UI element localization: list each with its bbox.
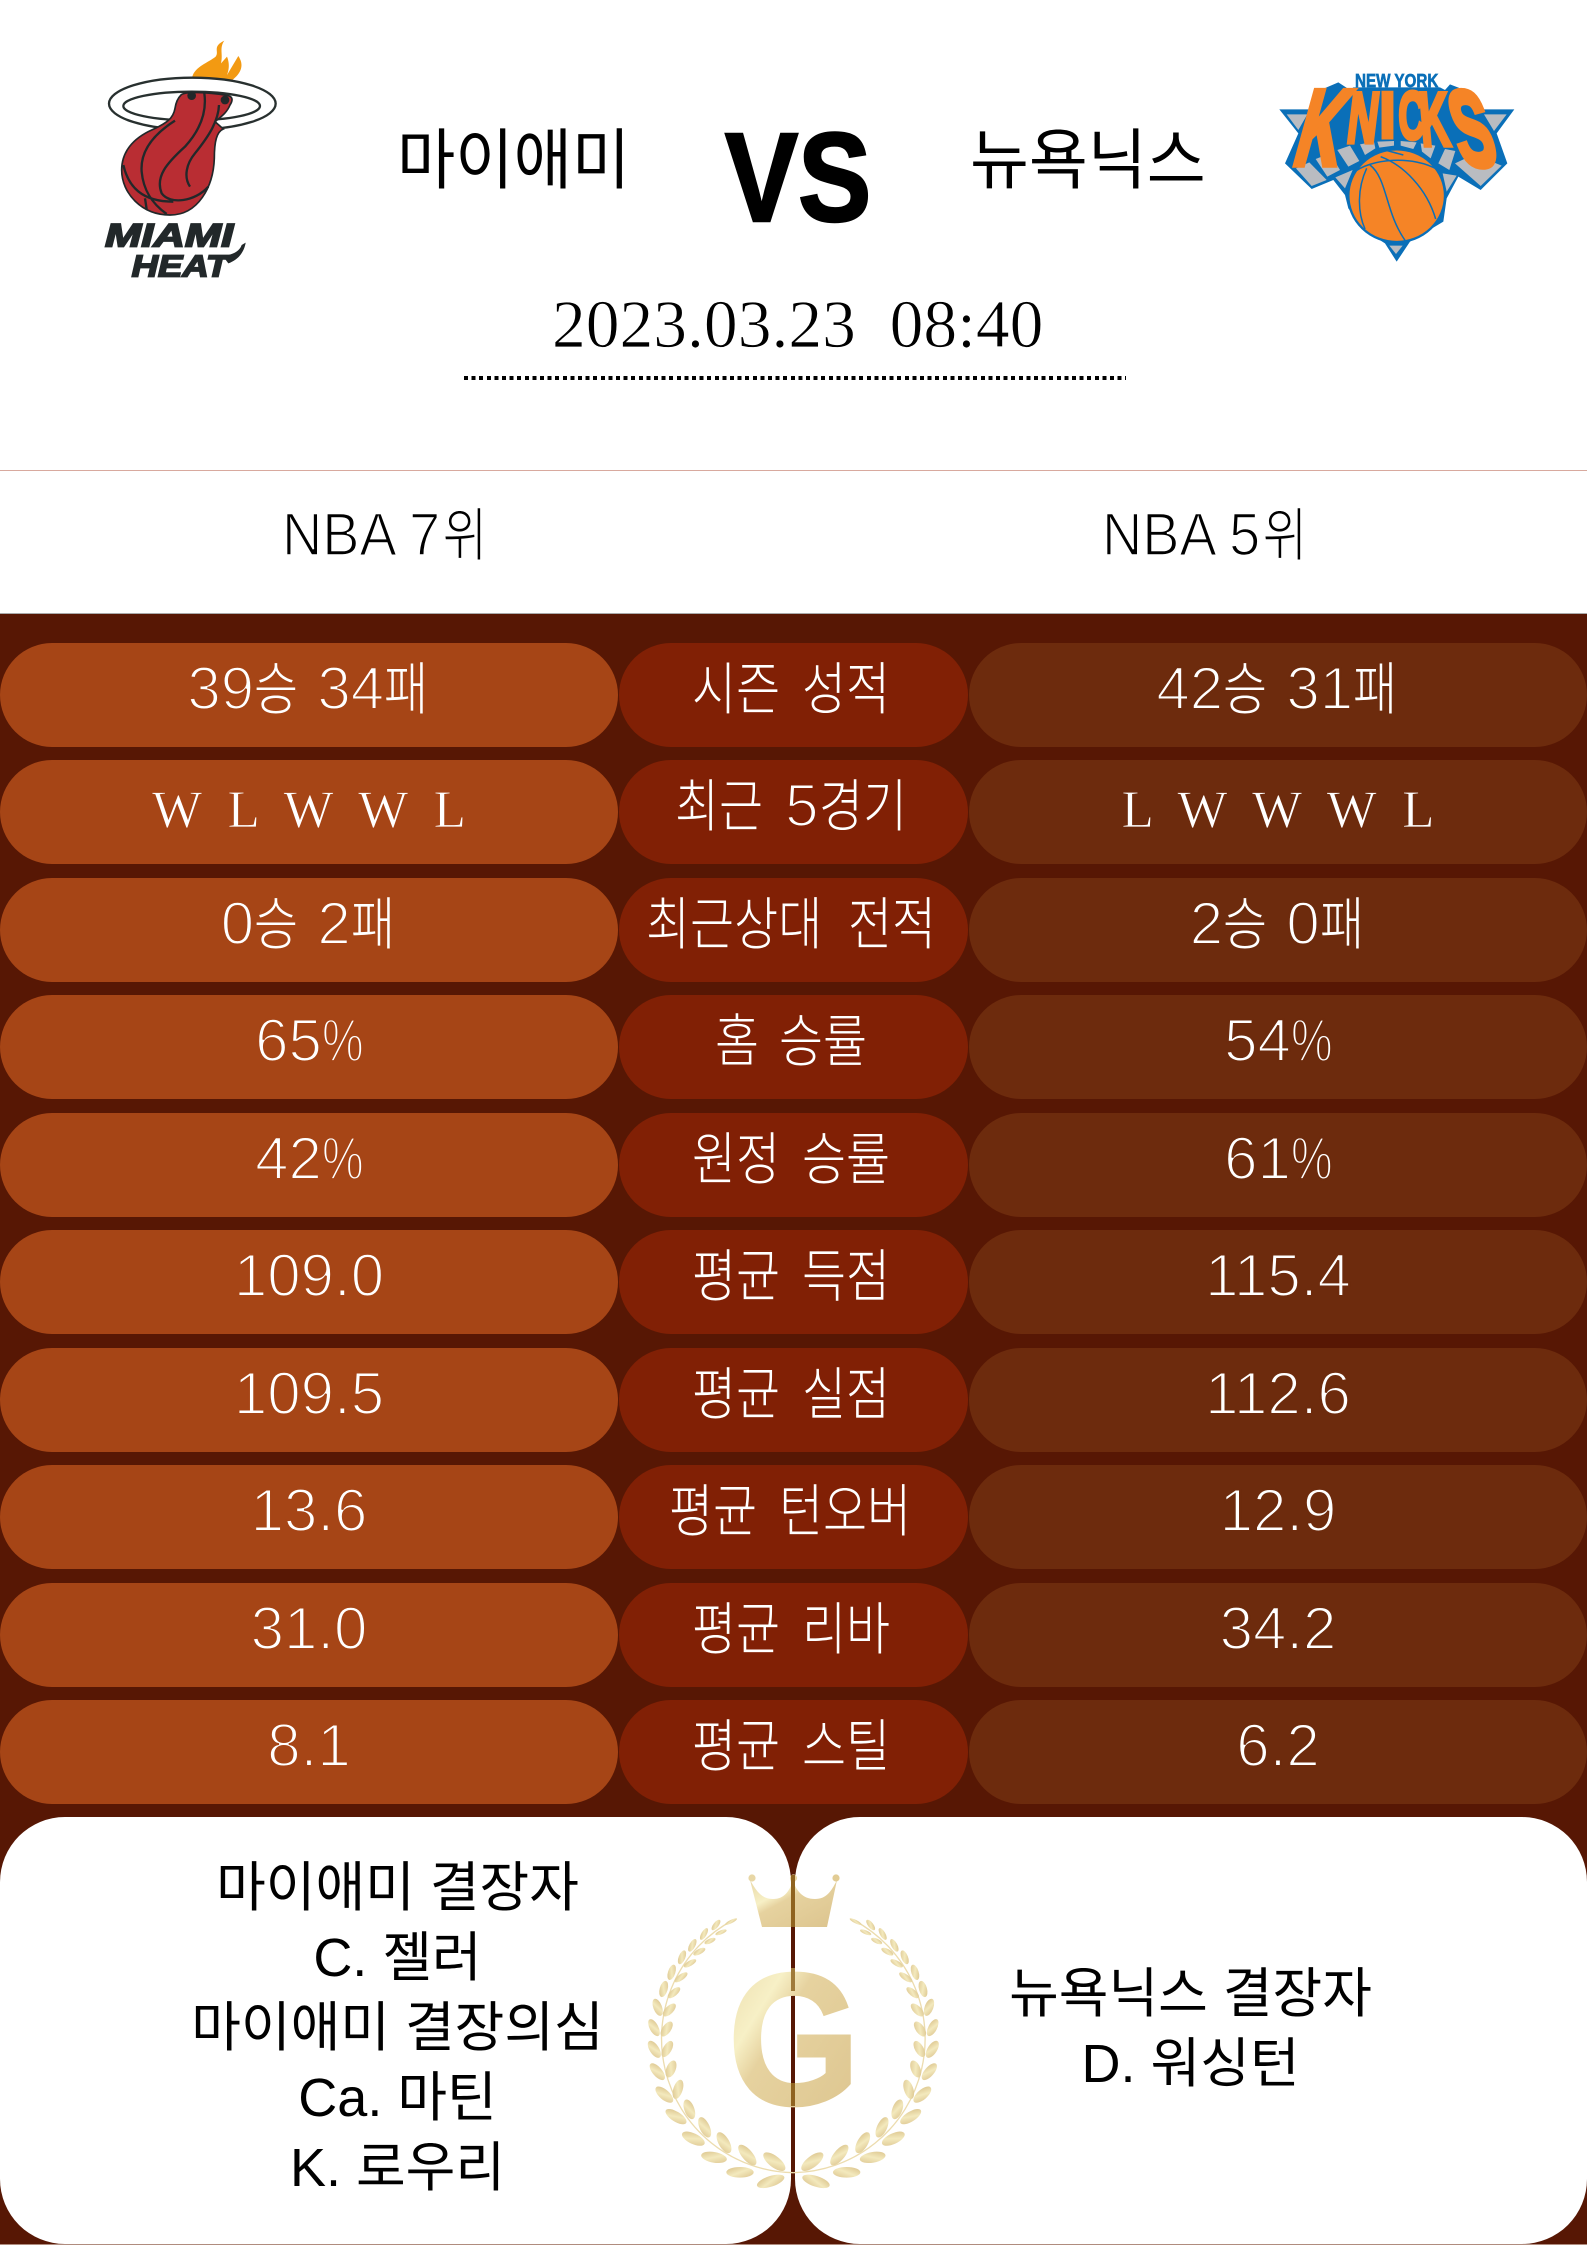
- label: 시즌: [692, 644, 780, 726]
- home value: [0, 643, 618, 747]
- away value: %: [1291, 1007, 1332, 1074]
- label: 전적: [848, 879, 936, 961]
- label: [619, 1700, 968, 1804]
- panel: statistics comparison: [0, 613, 1587, 2245]
- row: away win rate: [0, 1113, 1587, 1217]
- label: 평균: [669, 1466, 757, 1548]
- away value: L W W W L: [1121, 781, 1435, 839]
- label: 경기: [819, 761, 907, 843]
- logo text: MIAMI: MIAMI: [105, 218, 235, 254]
- text: home team absences: Ca. 마틴: [298, 2068, 497, 2128]
- label: 원정: [692, 1114, 780, 1196]
- away value: 승: [1223, 644, 1267, 726]
- away team rank: NBA 5: [1102, 501, 1260, 568]
- away value: 115.4: [1205, 1242, 1351, 1309]
- away value: [969, 1230, 1587, 1334]
- row: last five games: [0, 760, 1587, 864]
- label: 승률: [779, 996, 867, 1078]
- panel: home absences: [0, 1817, 791, 2244]
- away value: [969, 760, 1587, 864]
- logo text: KNICKS: [1284, 68, 1507, 189]
- letter G: G: [728, 1934, 860, 2144]
- home value: [0, 1700, 618, 1804]
- logo text: KNICKS: N: [1343, 79, 1383, 158]
- label: 승률: [802, 1114, 890, 1196]
- label: 최근: [675, 761, 764, 843]
- label: 득점: [802, 1231, 890, 1313]
- away value: 42 31: [1156, 655, 1353, 722]
- label: [619, 760, 968, 864]
- row: recent head to head: [0, 878, 1587, 982]
- home value: %: [322, 1125, 363, 1192]
- home value: 39 34: [187, 655, 384, 722]
- home value: 65: [255, 1007, 322, 1074]
- label: 실점: [802, 1349, 890, 1431]
- text: home team absences: [191, 1858, 604, 2198]
- away value: 6.2: [1236, 1712, 1320, 1779]
- text: home team absences: 마이애미 결장의심: [191, 1998, 604, 2058]
- label: 턴오버: [779, 1466, 911, 1548]
- text: home team absences: 마이애미 결장자: [216, 1858, 579, 1918]
- label: 홈: [715, 996, 759, 1078]
- home value: [0, 1583, 618, 1687]
- match date and time: 2023.03.23 08:40: [552, 286, 1043, 362]
- logo text: NEW YORK: NEW YORK: [1355, 70, 1439, 91]
- home value: 31.0: [251, 1595, 367, 1662]
- logo text: KNICKS: S: [1437, 69, 1507, 189]
- label: 평균: [692, 1701, 780, 1783]
- home value: [0, 878, 618, 982]
- dotted underline: [464, 376, 1126, 380]
- label: [619, 1230, 968, 1334]
- away value: 패: [1353, 644, 1397, 726]
- away value: 112.6: [1205, 1360, 1351, 1427]
- text: away team absences: D. 워싱턴: [1081, 2034, 1300, 2094]
- label: 평균: [692, 1231, 780, 1313]
- away value: [969, 1348, 1587, 1452]
- home value: 13.6: [251, 1477, 367, 1544]
- row: average points allowed: [0, 1348, 1587, 1452]
- logo text: HEAT: HEAT: [132, 250, 231, 284]
- logo text: KNICKS: C: [1398, 78, 1425, 154]
- home team rank: NBA 7: [282, 501, 440, 568]
- away value: [969, 995, 1587, 1099]
- logo text: KNICKS: K: [1284, 68, 1362, 187]
- text: away team absences: [1009, 1964, 1372, 2094]
- title: away team name: 뉴욕닉스: [970, 107, 1206, 203]
- home value: 8.1: [267, 1712, 351, 1779]
- away value: 12.9: [1220, 1477, 1336, 1544]
- laurel wreath: [645, 1917, 942, 2191]
- home value: 패: [384, 644, 428, 726]
- away value: [969, 1113, 1587, 1217]
- label: 성적: [802, 644, 890, 726]
- away value: 패: [1320, 879, 1364, 961]
- row: average points: [0, 1230, 1587, 1334]
- home value: 0 2: [221, 890, 351, 957]
- icon: gold crown and wreath emblem: [645, 1874, 942, 2191]
- home value: W L W W L: [152, 781, 466, 839]
- logo text: KNICKS: I: [1379, 80, 1396, 152]
- label: [619, 995, 968, 1099]
- crown: [748, 1874, 840, 1927]
- home value: 패: [351, 879, 395, 961]
- icon: New York Knicks logo: [1279, 68, 1514, 262]
- label: 평균: [692, 1349, 780, 1431]
- row: average rebounds: [0, 1583, 1587, 1687]
- label: [619, 1583, 968, 1687]
- text: home team absences: C. 젤러: [313, 1928, 482, 1988]
- title: home team name: 마이애미: [397, 107, 630, 203]
- home team rank: [282, 490, 487, 572]
- away team rank: 위: [1263, 490, 1307, 572]
- text: away team absences: 뉴욕닉스 결장자: [1009, 1964, 1372, 2024]
- label: [619, 1113, 968, 1217]
- home value: [0, 1230, 618, 1334]
- home value: [0, 1113, 618, 1217]
- label: [619, 643, 968, 747]
- away team rank: [1102, 490, 1307, 572]
- logo text: KNICKS: K: [1416, 77, 1453, 162]
- row: average steals: [0, 1700, 1587, 1804]
- panel: away absences: [795, 1817, 1587, 2244]
- label: [619, 878, 968, 982]
- label: [619, 1348, 968, 1452]
- away value: [969, 1465, 1587, 1569]
- away value: [969, 1583, 1587, 1687]
- away value: [969, 878, 1587, 982]
- away value: 61: [1224, 1125, 1291, 1192]
- home value: [0, 760, 618, 864]
- home value: 109.5: [234, 1360, 384, 1427]
- row: home win rate: [0, 995, 1587, 1099]
- label: 평균: [692, 1584, 780, 1666]
- home value: 42: [255, 1125, 322, 1192]
- home value: 승: [254, 879, 298, 961]
- away value: [969, 1700, 1587, 1804]
- row: average turnovers: [0, 1465, 1587, 1569]
- title: VS: VS: [725, 107, 871, 248]
- row: season record: [0, 643, 1587, 747]
- away value: [969, 643, 1587, 747]
- home value: %: [322, 1007, 363, 1074]
- label: 5: [785, 772, 819, 839]
- label: 스틸: [802, 1701, 890, 1783]
- home value: [0, 1348, 618, 1452]
- away value: 34.2: [1220, 1595, 1336, 1662]
- text: home team absences: K. 로우리: [290, 2138, 505, 2198]
- home value: 승: [254, 644, 298, 726]
- away value: 승: [1223, 879, 1267, 961]
- away value: 54: [1224, 1007, 1291, 1074]
- away value: %: [1291, 1125, 1332, 1192]
- label: 최근상대: [646, 879, 822, 961]
- label: [619, 1465, 968, 1569]
- home value: [0, 1465, 618, 1569]
- label: 리바: [802, 1584, 890, 1666]
- home team rank: 위: [443, 490, 487, 572]
- away value: 2 0: [1190, 890, 1320, 957]
- home value: [0, 995, 618, 1099]
- home value: 109.0: [234, 1242, 384, 1309]
- icon: Miami Heat logo: [105, 41, 276, 284]
